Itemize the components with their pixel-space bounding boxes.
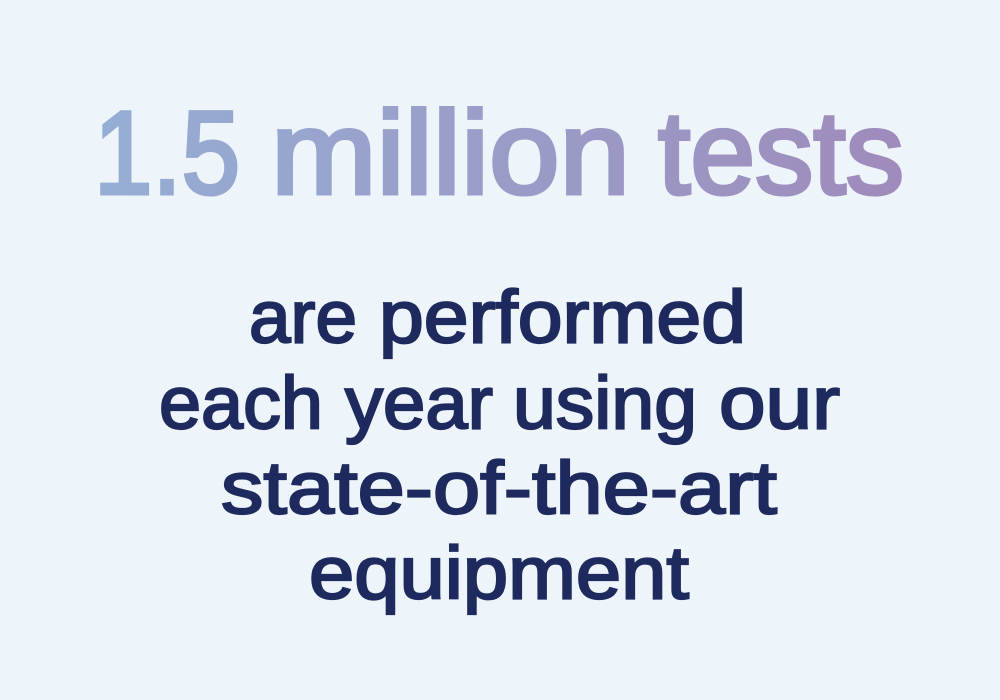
title: 1.5 million tests: 1.5 [94, 88, 240, 220]
line 2: our [719, 362, 840, 444]
line 3: state-of-the-art [221, 446, 777, 530]
line 2: each [159, 362, 323, 444]
title: 1.5 million tests [94, 88, 904, 220]
line 1: are [249, 276, 357, 358]
title: 1.5 million tests: million [271, 88, 630, 220]
line 1: performed [379, 276, 746, 358]
line 2: year [345, 362, 493, 444]
line 2 [159, 362, 840, 444]
title: 1.5 million tests: tests [658, 88, 904, 220]
body text block [159, 276, 840, 614]
line 1 [249, 276, 746, 358]
line 2: using [513, 362, 697, 444]
line 4: equipment [309, 532, 689, 614]
